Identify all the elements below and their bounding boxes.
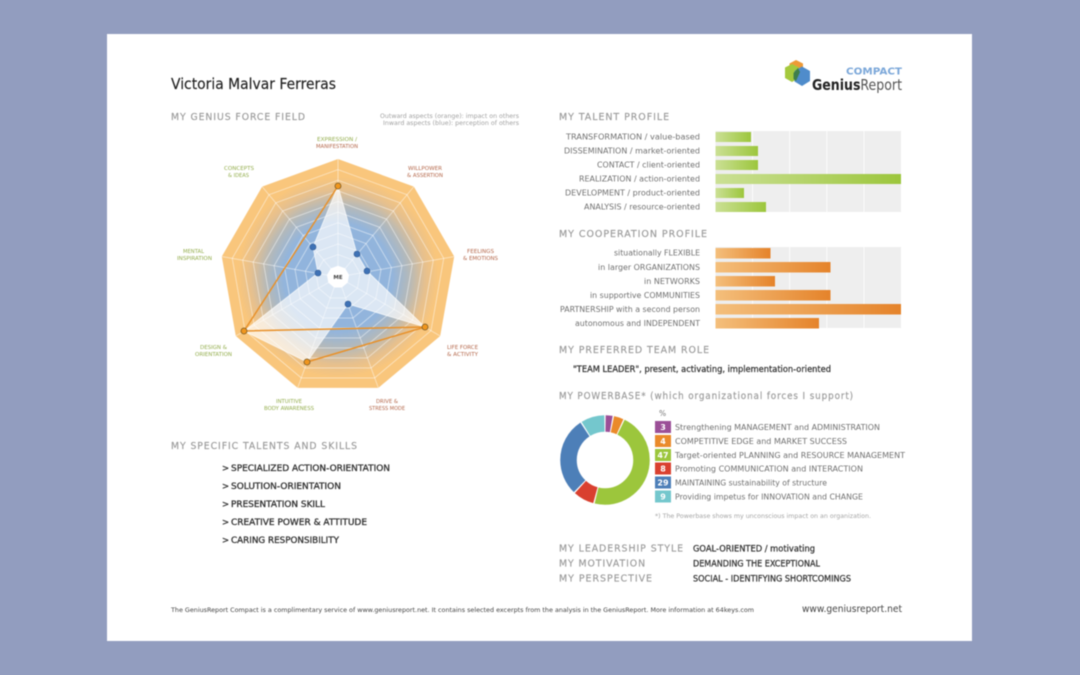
talent labels: ANALYSIS / resource-oriented <box>584 202 700 212</box>
talent labels: DEVELOPMENT / product-oriented <box>565 188 700 198</box>
skills list: > <box>222 518 229 528</box>
logo: Compact Genius Report <box>785 60 902 94</box>
powerbase footnote: *) The Powerbase shows my unconscious impact on an organization. <box>655 513 871 520</box>
powerbase legend <box>655 421 905 502</box>
axis label: feelings: FEELINGS <box>467 249 495 255</box>
heading: team role: MY PREFERRED TEAM ROLE <box>559 345 710 356</box>
powerbase legend: Promoting COMMUNICATION and INTERACTION <box>675 464 863 474</box>
leadership style: GOAL-ORIENTED / motivating <box>693 544 815 554</box>
perspective: SOCIAL - IDENTIFYING SHORTCOMINGS <box>693 574 851 584</box>
powerbase legend: 3 <box>660 423 666 432</box>
talent labels: REALIZATION / action-oriented <box>579 174 700 184</box>
axis label: concepts: CONCEPTS <box>224 166 254 172</box>
icon: overlapping hexagons <box>785 60 810 86</box>
axis label: life force <box>447 345 479 358</box>
percent header: % <box>659 409 666 418</box>
panel: cooperation profile <box>559 229 901 328</box>
axis label: mental: MENTAL <box>183 249 205 255</box>
axis label: design: ORIENTATION <box>195 352 232 358</box>
perspective <box>559 574 851 584</box>
axis label: concepts <box>224 166 254 179</box>
talent labels: TRANSFORMATION / value-based <box>565 132 700 142</box>
heading: talent profile: MY TALENT PROFILE <box>559 112 670 123</box>
center label: ME <box>327 266 349 288</box>
panel: powerbase <box>559 391 905 520</box>
radar background nonagon <box>222 159 454 388</box>
powerbase legend: Strengthening MANAGEMENT and ADMINISTRATION <box>675 423 880 432</box>
cooperation labels <box>560 248 700 328</box>
axis label: mental <box>177 249 212 262</box>
team role text: "TEAM LEADER", present, activating, implementation-oriented <box>573 365 831 375</box>
cooperation labels: PARTNERSHIP with a second person <box>560 305 700 314</box>
title: Victoria Malvar Ferreras <box>171 75 336 93</box>
panel: talent profile <box>559 112 901 212</box>
axis label: concepts: & IDEAS <box>228 173 249 179</box>
axis label: drive: DRIVE & <box>376 399 399 405</box>
bar chart: talent profile <box>716 131 901 212</box>
axis label: expression <box>316 137 358 150</box>
cooperation labels: in larger ORGANIZATIONS <box>598 263 700 272</box>
logo text: genius report: GeniusReport <box>812 76 902 94</box>
skills list: > <box>222 464 229 474</box>
skills list: SPECIALIZED ACTION-ORIENTATION <box>231 464 390 474</box>
axis label: expression: EXPRESSION / <box>317 137 357 143</box>
legend note: Outward aspects (orange): impact on others <box>380 112 520 120</box>
donut chart <box>568 424 642 496</box>
skills list: > <box>222 482 229 492</box>
motivation: MY MOTIVATION <box>559 558 646 570</box>
radar chart <box>177 137 498 412</box>
axis label: design <box>195 345 232 358</box>
motivation: DEMANDING THE EXCEPTIONAL <box>693 560 820 570</box>
powerbase legend: 29 <box>657 478 669 488</box>
talent labels: CONTACT / client-oriented <box>597 160 700 170</box>
report page <box>107 34 972 641</box>
panel: preferred team role <box>559 345 831 375</box>
powerbase legend: 47 <box>657 451 669 460</box>
skills list: CREATIVE POWER & ATTITUDE <box>231 518 367 528</box>
skills list <box>222 464 390 546</box>
panel: specific talents and skills <box>171 441 390 546</box>
heading: powerbase: MY POWERBASE* (which organizational forces I support) <box>559 391 854 402</box>
axis label: intuitive: BODY AWARENESS <box>264 406 314 412</box>
center label: ME: ME <box>333 275 343 281</box>
leadership style <box>559 544 815 554</box>
footer note: The GeniusReport Compact is a complimentary service of www.geniusreport.net. It contains selected excerpts from the analysis in the GeniusReport. More information at 64keys.com <box>170 606 754 614</box>
axis label: feelings <box>463 249 498 262</box>
outward aspects line <box>244 186 425 362</box>
legend note: Inward aspects (blue): perception of others <box>383 119 520 127</box>
panel: leadership summary <box>559 544 851 584</box>
profile polygon <box>244 186 425 362</box>
axis label: feelings: & EMOTIONS <box>463 256 498 262</box>
powerbase legend: COMPETITIVE EDGE and MARKET SUCCESS <box>675 437 847 446</box>
skills list: SOLUTION-ORIENTATION <box>231 482 341 492</box>
heading: force field: MY GENIUS FORCE FIELD <box>171 112 306 123</box>
bar chart: cooperation profile <box>716 247 901 328</box>
perspective: MY PERSPECTIVE <box>559 574 653 584</box>
outward aspect markers <box>241 183 428 365</box>
powerbase legend: 8 <box>660 464 666 474</box>
motivation <box>559 558 820 570</box>
axis label: expression: MANIFESTATION <box>316 144 358 150</box>
footer url: www.geniusreport.net <box>802 604 902 615</box>
inward aspect markers <box>310 244 370 307</box>
axis label: intuitive: INTUITIVE <box>276 399 303 405</box>
skills list: > <box>222 500 229 510</box>
heading: cooperation profile: MY COOPERATION PROFILE <box>559 229 708 240</box>
skills list: PRESENTATION SKILL <box>231 500 325 510</box>
axis label: willpower: WILLPOWER <box>408 166 442 172</box>
logo text: compact: COMPACT <box>846 66 902 78</box>
powerbase legend: Providing impetus for INNOVATION and CHANGE <box>675 492 863 502</box>
legend note <box>380 112 520 127</box>
talent labels <box>564 132 700 212</box>
axis label: life force: LIFE FORCE <box>447 345 479 351</box>
axis label: intuitive <box>264 399 314 412</box>
skills list: > <box>222 536 229 546</box>
cooperation labels: autonomous and INDEPENDENT <box>575 319 700 328</box>
axis label: drive <box>369 399 405 412</box>
axis label: willpower <box>407 166 443 179</box>
heading: talents and skills: MY SPECIFIC TALENTS AND SKILLS <box>171 441 358 452</box>
axis label: drive: STRESS MODE <box>369 406 405 412</box>
axis label: willpower: & ASSERTION <box>407 173 443 179</box>
cooperation labels: situationally FLEXIBLE <box>614 248 700 258</box>
leadership style: MY LEADERSHIP STYLE <box>559 544 684 554</box>
cooperation labels: in NETWORKS <box>644 277 700 286</box>
powerbase legend: MAINTAINING sustainability of structure <box>675 478 827 488</box>
skills list: CARING RESPONSIBILITY <box>231 536 340 546</box>
powerbase legend: 9 <box>660 492 666 502</box>
talent labels: DISSEMINATION / market-oriented <box>564 146 700 156</box>
axis label: design: DESIGN & <box>200 345 228 351</box>
panel: genius force field <box>171 112 520 412</box>
powerbase legend: Target-oriented PLANNING and RESOURCE MANAGEMENT <box>674 451 905 460</box>
cooperation labels: in supportive COMMUNITIES <box>590 291 700 300</box>
axis label: mental: INSPIRATION <box>177 256 212 262</box>
powerbase legend: 4 <box>660 437 666 446</box>
axis label: life force: & ACTIVITY <box>447 352 479 358</box>
